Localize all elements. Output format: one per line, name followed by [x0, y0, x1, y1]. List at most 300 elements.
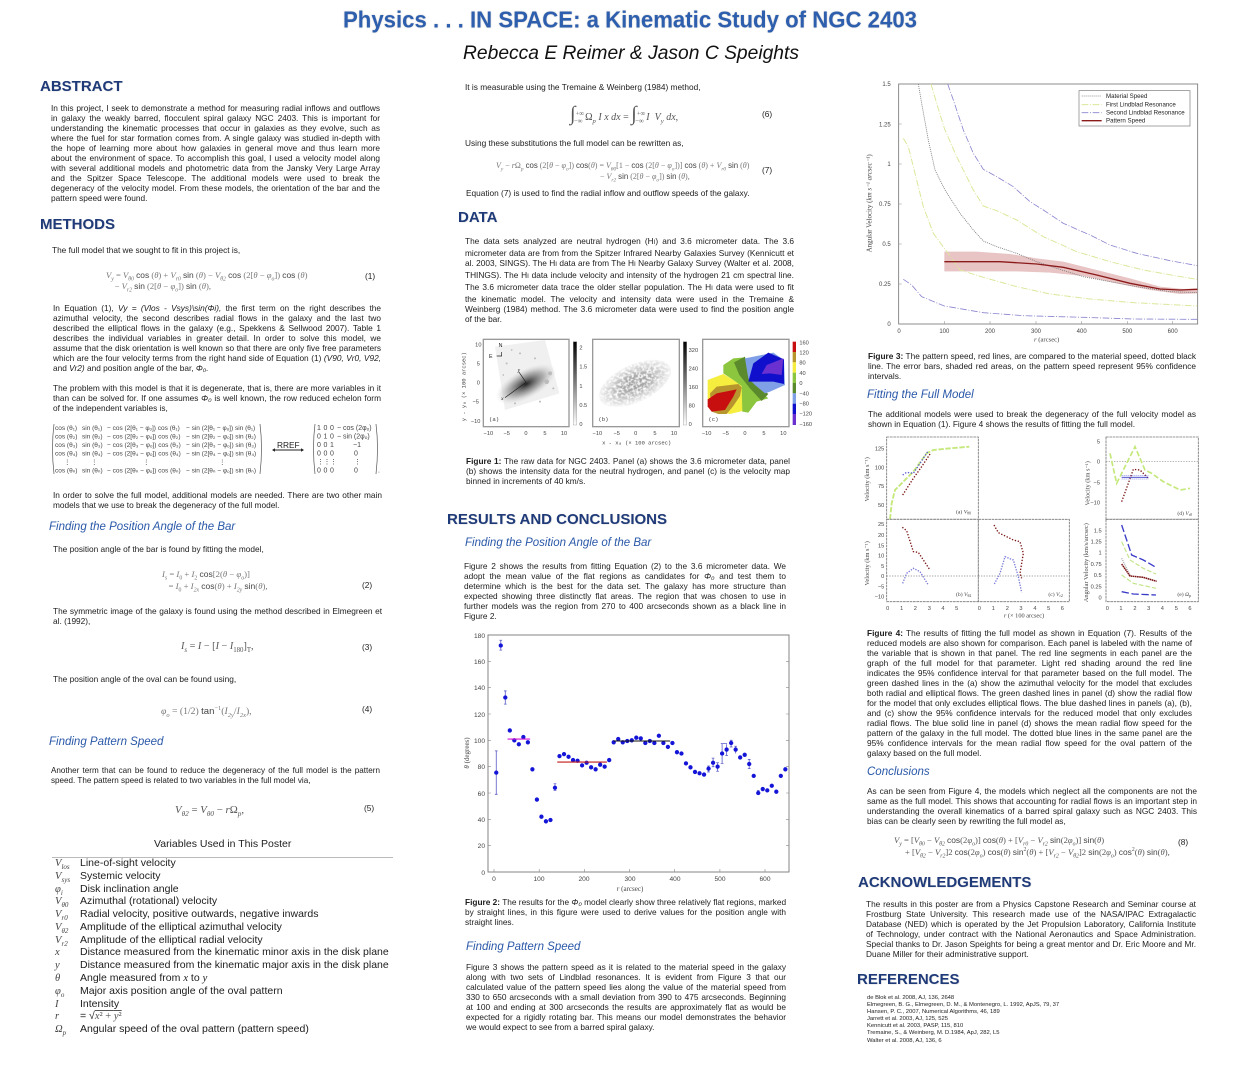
tick labels: 300: [1031, 329, 1042, 335]
panel a: [887, 437, 978, 519]
colorbar c: 160: [799, 341, 809, 347]
tick labels: 100: [875, 465, 884, 471]
matrix equation with RREF arrow: −1: [353, 442, 361, 449]
matrix equation with RREF arrow: 1: [317, 425, 321, 432]
text: abstract: in galaxy the weakly barred, flocculent spiral galaxy NGC 2403. This is important for: [51, 113, 380, 123]
panel b: [887, 519, 978, 602]
matrix equation with RREF arrow: − sin (2[θₙ − φₒ]) sin (θₙ): [186, 468, 256, 474]
figure 4 caption: 95% confidence intervals for the mean radial flow speed for the oval pattern of the: [867, 738, 1192, 748]
variable row: [55, 1010, 122, 1022]
figure 4 caption: pattern of the galaxy in the full model. The dotted blue lines in the same panel are the: [867, 728, 1192, 738]
subheading: position angle results: Finding the Position Angle of the Bar: [465, 537, 651, 549]
text: abstract: where the fuel for star formation comes from. A single galaxy was studied in-depth with: [51, 133, 380, 143]
text: symmetric image: al. (1992),: [53, 616, 90, 626]
tick labels: 60: [478, 791, 485, 798]
text: data description: [465, 236, 794, 324]
equation 4: φo = (1/2) tan−1(I2y/I2x),: [161, 705, 252, 719]
variable row: Angle measured from x to y: [80, 972, 207, 984]
figure 1 axis labels: 0: [743, 431, 747, 437]
figure 4: multi-panel velocity fits: [0, 0, 1260, 630]
tick labels: 200: [578, 876, 590, 883]
text: oval position angle: The position angle of the oval can be found using,: [53, 674, 236, 684]
equation 7: Vy − rΩp cos (2[θ − φo]) cos(θ) = Vθ0[1 − cos (2[θ − φo])] cos (θ) + Vr0 sin (θ): [496, 161, 749, 173]
matrix equation with RREF arrow: − cos (2[θ₁ − φₒ]) cos (θ₁): [107, 425, 180, 432]
text: figure 2 discussion: [464, 561, 786, 621]
variable row: r: [55, 1011, 59, 1022]
text: conclusions: [867, 786, 1197, 826]
text: equation 1 description: and Vr2) and position angle of the bar, Φ₀.: [53, 363, 209, 373]
tick labels: 6: [1061, 606, 1064, 612]
colorbar b: 160: [689, 385, 698, 391]
figure 1 axis labels: −10: [702, 431, 711, 437]
tick labels: 0: [978, 606, 981, 612]
colorbar a: 0.5: [579, 403, 587, 409]
figure 2 caption: [465, 897, 786, 927]
matrix equation with RREF arrow: cos (θ₃): [55, 442, 78, 449]
variable row: Ωp: [55, 1024, 66, 1037]
tick labels: 25: [878, 522, 884, 528]
tick labels: 0.5: [1094, 573, 1102, 579]
text: acknowledgements: [866, 899, 1196, 959]
colorbar c: 80: [799, 361, 806, 367]
panel e: [1106, 519, 1198, 602]
text: conclusions: bias can be clearly seen by rewriting the full model as,: [867, 816, 1066, 826]
figure 2 caption: Figure 2: The results for the Φ₀ model clearly show three relatively flat regions, marked: [465, 897, 786, 907]
text: equation 1 description: described the elliptical flows in the galaxy (e.g., Spekkens & Sellwood 2007). Table 1: [53, 323, 381, 333]
panel a: 3.6 micrometer map: [483, 339, 569, 427]
tick labels: 4: [941, 606, 945, 612]
tick labels: 0: [1097, 460, 1100, 466]
variable row: Vθ2: [55, 922, 68, 935]
figure 3 caption: line. The error bars, shaded red areas, on the pattern speed represent 95% confidence: [868, 361, 1196, 371]
tick labels: 0: [881, 574, 884, 580]
matrix equation with RREF arrow: 0: [354, 468, 358, 474]
tick labels: 15: [878, 543, 884, 549]
text: full model fit: shown in Equation (1). Figure 4 shows the results of fitting the full model.: [868, 419, 1135, 429]
heading: data: DATA: [458, 209, 497, 226]
figure 1 axis labels: −5: [613, 431, 620, 437]
panel d: r0: [1189, 512, 1192, 517]
figure 2 caption: by straight lines, in this figure were used to derive values for the position angle with: [465, 907, 786, 917]
text: degeneracy problem: [53, 383, 381, 413]
text: pattern speed intro: [51, 766, 380, 785]
tick labels: 1: [887, 162, 891, 168]
text: equation 1 description: assume that the disk orientation is well known so that there are only five free parameters: [53, 343, 381, 353]
equation 5: Vθ2 = Vθ0 − rΩp,: [175, 804, 244, 818]
variable row: Intensity: [80, 998, 119, 1010]
text: equation 1 description: which are the four velocity terms from the right hand side of Equation (1) (V90, Vr0, V92,: [53, 353, 381, 363]
figure 4 caption: galaxy based on the full model.: [867, 748, 981, 758]
equation 7: [496, 161, 750, 184]
matrix equation with RREF arrow: − sin (2[θ₂ − φₒ]) sin (θ₂): [186, 434, 256, 440]
text: equation 1 description: azimuthal velocity, the second describes radial flows in the galaxy and the last two: [53, 313, 381, 323]
text: acknowledgements: Frostburg State University. This research made use of the NASA/IPAC Extragalactic: [866, 909, 1196, 919]
text: conclusions: As can be seen from Figure 4, the models which neglect all the components are not the: [867, 786, 1197, 796]
matrix equation with RREF arrow: sin (θ₃): [82, 442, 103, 449]
text: acknowledgements: Special thanks to Dr. Jason Speights for being a great mentor and Dr. Eric Moore and Mr.: [866, 939, 1196, 949]
tick labels: [474, 633, 771, 883]
matrix equation with RREF arrow: cos (θ₂): [55, 434, 77, 440]
tick labels: 1: [1099, 551, 1102, 557]
text: full model fit: The additional models were used to break the degeneracy of the full velocity model as: [868, 409, 1196, 419]
text: degeneracy problem: than can be solved for. If one assumes Φ₀ is well known, the row reduced echelon form: [53, 393, 381, 403]
panel e: (e) Ω: [1177, 592, 1189, 598]
panel b: hydrogen intensity map: (b): [598, 416, 609, 423]
tick labels: 100: [939, 329, 950, 335]
figure 1 axis labels: 10: [561, 431, 567, 437]
tick labels: 0.5: [882, 242, 891, 248]
text: equation 1 description: In Equation (1), Vy = (Vlos - Vsys)\sin(Φi), the first term on the right describes the: [53, 303, 381, 313]
matrix equation with RREF arrow: cos (θₙ): [55, 468, 77, 474]
matrix equation with RREF arrow: 0: [354, 450, 358, 458]
figure 1 axis labels: 5: [653, 431, 657, 437]
colorbar c: −40: [799, 391, 809, 397]
tick labels: 0.25: [1091, 585, 1102, 591]
tick labels: 200: [985, 329, 996, 335]
matrix equation with RREF arrow: cos (θ₄): [55, 450, 78, 458]
figure 1 axis labels: 0: [634, 431, 637, 437]
text: abstract: the hope of learning more about how galaxies in general move and thus learn more: [51, 143, 380, 153]
matrix equation with RREF arrow: ⋮: [64, 459, 70, 466]
text: figure 3 discussion: [466, 962, 786, 1032]
colorbar c: [793, 341, 812, 428]
text: figure 3 discussion: 330 to 650 arcseconds with a small deviation from 390 to 475 arcseconds. Beginning: [466, 992, 786, 1002]
equation number 5: (5): [364, 803, 374, 813]
matrix equation with RREF arrow: − cos (2[θ₃ − φₒ]) cos (θ₃): [107, 442, 181, 449]
colorbar a: 1: [579, 384, 582, 390]
tick labels: 0: [887, 322, 891, 328]
axis ticks: [488, 661, 789, 872]
text: conclusions: understanding the overall kinematics of a barred spiral galaxy such as NGC 2403. This: [867, 806, 1197, 816]
tick labels: 600: [759, 876, 771, 883]
text: abstract: and the Spitzer Space Telescope. The additional models were used to break the: [51, 173, 380, 183]
figure 3 caption: intervals.: [868, 371, 901, 381]
subheading: pattern speed results: Finding Pattern Speed: [466, 941, 580, 953]
matrix equation with RREF arrow: − cos (2[θₙ − φₒ]) cos (θₙ): [107, 468, 181, 474]
legend: Second Lindblad Resonance: [1106, 110, 1185, 117]
text: figure 2 discussion: Figure 2 shows the results from fitting Equation (2) to the 3.6 micrometer data. We: [464, 561, 786, 571]
figure 1 axis labels: −10: [593, 431, 602, 437]
colorbar c: −80: [799, 402, 809, 408]
table title: variables: Variables Used in This Poster: [154, 838, 291, 850]
figure 4 caption: graph of the full model for that parameter. Light red shading around the red line: [867, 658, 1192, 668]
pattern speed curve: [944, 262, 1197, 290]
tick labels: 5: [881, 564, 884, 570]
figure 1 axis labels: 5: [477, 361, 480, 367]
panel a: 3.6 micrometer map: E: [489, 354, 493, 360]
tick labels: [875, 440, 1192, 612]
equation 8: Vy = [Vθ0 − Vθ2 cos(2φo)] cos(θ) + [Vr0 − Vr2 sin(2φo)] sin(θ): [894, 835, 1104, 848]
matrix equation with RREF arrow: 0: [317, 450, 321, 458]
colorbar a: 0: [579, 422, 582, 428]
text: figure 3 discussion: Figure 3 shows the pattern speed as it is related to the material speed in the galaxy: [466, 962, 786, 972]
matrix equation with RREF arrow: 0: [324, 468, 328, 474]
tick labels: 6: [1188, 606, 1192, 612]
equation number 1: (1): [365, 271, 375, 281]
text: abstract: degeneracy of the velocity model. From these models, the orientation of the bar and the: [51, 183, 380, 193]
matrix equation with RREF arrow: 0: [324, 425, 328, 432]
panel c: velocity map: (c): [708, 416, 719, 423]
text: acknowledgements: of Technology, under contract with the National Aeronautics and Space Administration.: [866, 929, 1196, 939]
tick labels: 1.5: [1094, 529, 1102, 535]
variable row: Major axis position angle of the oval pattern: [80, 985, 283, 997]
text: figure 2 discussion: expected showing three distinctly flat areas. The region that was chosen to use in: [464, 591, 786, 601]
matrix equation with RREF arrow: − cos (2[θ₄ − φₒ]) cos (θ₄): [107, 450, 181, 458]
text: references list: de Blok et al. 2008, AJ, 136, 2648: [867, 994, 954, 1000]
equation 2: [162, 569, 268, 594]
variable row: [55, 882, 179, 897]
tick labels: 400: [669, 876, 681, 883]
variable row: θ: [55, 973, 60, 984]
tick labels: 80: [478, 764, 485, 771]
figure 1 axis labels: 5: [543, 431, 547, 437]
variable row: Vlos: [55, 858, 70, 871]
tick labels: 0.75: [1091, 562, 1102, 568]
figure 4 caption: [867, 628, 1192, 758]
figure 1: galaxy maps: [461, 338, 812, 446]
matrix equation with RREF arrow: ⋮: [219, 459, 226, 466]
tick labels: [879, 82, 1178, 335]
variable row: y: [55, 960, 60, 971]
matrix equation with RREF arrow: sin (θₙ): [82, 468, 103, 474]
equation 3: Is = I − [I − I180]T,: [181, 641, 254, 654]
text: full model fit: [868, 409, 1196, 429]
heading: references: REFERENCES: [857, 971, 960, 988]
tick labels: 0.75: [879, 202, 891, 208]
heading: acknowledgements: ACKNOWLEDGEMENTS: [858, 874, 1031, 891]
figure 1 axis labels: −10: [484, 431, 493, 437]
figure 3: angular velocity chart: Angular Velocity (km s⁻¹ arcsec⁻¹): [866, 154, 874, 252]
panel e: p: [1189, 593, 1191, 598]
variable row: Vr2: [55, 935, 68, 948]
tick labels: 5: [1097, 440, 1100, 446]
panel b: hydrogen intensity map: [592, 339, 679, 427]
heading: abstract: ABSTRACT: [40, 78, 122, 95]
matrix equation with RREF arrow: RREF: [277, 440, 300, 450]
legend: Material Speed: [1106, 93, 1148, 100]
tick labels: 5: [1175, 606, 1178, 612]
variable row: Distance measured from the kinematic major axis in the disk plane: [80, 959, 389, 971]
text: references list: Tremaine, S., & Weinberg, M. D.1984, ApJ, 282, L5: [867, 1030, 1000, 1036]
text: data description: Weinberg (1984) method. The 3.6 micrometer data were used to find the position angle: [465, 304, 794, 314]
panel b: (b) V: [956, 592, 967, 598]
figure 1 axis labels: [461, 342, 786, 446]
variable row: φi: [55, 884, 63, 897]
tick labels: 180: [474, 633, 485, 640]
tick labels: 5: [1047, 606, 1050, 612]
variable row: Line-of-sight velocity: [80, 857, 176, 869]
text: symmetric image: The symmetric image of the galaxy is found using the method described in Elmegreen et: [53, 606, 382, 616]
heading: results and conclusions: RESULTS AND CONCLUSIONS: [447, 511, 667, 528]
colorbar c: 120: [799, 351, 809, 357]
panel a: (a) V: [956, 509, 967, 515]
variable row: = √x² + y²: [80, 1010, 122, 1022]
panel a: θ0: [967, 510, 971, 515]
panel b: θ2: [967, 593, 971, 598]
text: figure 3 discussion: we would expect to see from a barred spiral galaxy.: [466, 1022, 654, 1032]
figure 4 caption: and (c) show the 95% confidence intervals for the reduced model that only excludes: [867, 708, 1192, 718]
text: data description: the kinematic model. The velocity and intensity data were used in the Tremaine &: [465, 294, 794, 304]
variables table: [54, 857, 389, 1037]
colorbar b: 0: [689, 422, 692, 428]
matrix equation with RREF arrow: 0: [330, 434, 334, 440]
variable row: Azimuthal (rotational) velocity: [80, 895, 217, 907]
figure 1 axis labels: 10: [475, 342, 481, 348]
panel a: 3.6 micrometer map: x: [500, 396, 504, 402]
text: acknowledgements: Duane Miller for their administrative support.: [866, 949, 1029, 959]
tick labels: 3: [1147, 606, 1150, 612]
tick labels: 1.25: [879, 123, 891, 129]
tick labels: 0: [492, 876, 496, 883]
figure 1 axis labels: 5: [762, 431, 766, 437]
text: equation 7 note: Equation (7) is used to find the radial inflow and outflow speeds of the galaxy.: [466, 188, 750, 198]
table rule: [52, 857, 393, 858]
figure 3: angular velocity chart: [866, 82, 1198, 344]
tick labels: 0: [897, 329, 901, 335]
figure 1 axis labels: −5: [503, 431, 510, 437]
text: data description: The 3.6 micrometer data trace the older stellar population. The HI data were used to fit: [465, 282, 794, 292]
text: abstract: understanding the kinematic processes that occur in galaxies as they evolve, such as: [51, 123, 380, 133]
variable row: x: [55, 947, 60, 958]
tick labels: 0: [1106, 606, 1109, 612]
text: symmetric image: [53, 606, 382, 626]
matrix equation with RREF arrow: − sin (2[θ₄ − φₒ]) sin (θ₄): [186, 450, 256, 458]
legend: First Lindblad Resonance: [1106, 101, 1176, 108]
text: equation 1 description: describes the individual variables in greater detail. In order to solve this model, we: [53, 333, 381, 343]
tick labels: 2: [914, 606, 917, 612]
axis labels: r (× 100 arcsec): [1004, 613, 1044, 620]
variable row: Angular speed of the oval pattern (pattern speed): [80, 1023, 309, 1035]
subheading: fitting full model: Fitting the Full Model: [867, 389, 974, 401]
text: figure 2 discussion: determine which is the best for the data set. The galaxy has more structure than: [464, 581, 786, 591]
panel d: (d) V: [1177, 511, 1189, 517]
matrix equation with RREF arrow: sin (θ₄): [82, 450, 103, 458]
text: references list: Hansen, P. C., 2007, Numerical Algorithms, 46, 189: [867, 1009, 1000, 1015]
matrix equation with RREF arrow: sin (θ₂): [82, 434, 103, 440]
colorbar a: 1.5: [579, 365, 587, 371]
axis labels: [864, 457, 1091, 620]
matrix equation with RREF arrow: − cos (2[θ₂ − φₒ]) cos (θ₂): [107, 434, 180, 440]
figure 1 caption: Figure 1: The raw data for NGC 2403. Panel (a) shows the 3.6 micrometer data, panel: [466, 456, 790, 466]
equation 1: − Vr2 sin (2[θ − φo]) sin (θ),: [115, 281, 211, 294]
subheading: position angle: Finding the Position Angle of the Bar: [49, 521, 235, 533]
second Lindblad resonance curves: [903, 84, 1197, 319]
figure 1 axis labels: 10: [671, 431, 677, 437]
figure 1 axis labels: 10: [780, 431, 786, 437]
equation number 8: (8): [1178, 837, 1188, 847]
variable row: Amplitude of the elliptical radial velocity: [80, 934, 263, 946]
panel c: (c) V: [1048, 592, 1060, 598]
matrix equation with RREF arrow: 0: [324, 442, 328, 449]
variable row: Disk inclination angle: [80, 882, 179, 894]
tick labels: 2: [1133, 606, 1137, 612]
variable row: Systemic velocity: [80, 870, 161, 882]
text: abstract: In this project, I seek to demonstrate a method for measuring radial inflows and outflows: [51, 103, 380, 113]
figure 4 caption: for the model that only excludes elliptical flows. The blue dashed lines in panels (a), (b),: [867, 698, 1192, 708]
text: data description: micrometer data are from from the Spitzer Infrared Nearby Galaxies Survey (Kennicutt et: [465, 248, 794, 258]
text: abstract: [51, 103, 380, 203]
tick labels: 2: [1006, 606, 1009, 612]
tick labels: 20: [478, 843, 485, 850]
figure 1 axis labels: x - x₀ (× 100 arcsec): [602, 439, 671, 446]
variable row: φo: [55, 986, 64, 999]
text: figure 3 discussion: at 100 and ending at 300 arcseconds the results are approximately flat as would be: [466, 1002, 786, 1012]
matrix equation with RREF arrow: ⋮: [317, 459, 324, 466]
matrix equation with RREF arrow: 0: [330, 425, 334, 432]
text: references list: Walter et al. 2008, AJ, 136, 6: [867, 1038, 942, 1044]
tick labels: −10: [875, 595, 884, 601]
figure 1 axis labels: 0: [524, 431, 528, 437]
panel c: r2: [1060, 593, 1063, 598]
tick labels: 3: [928, 606, 931, 612]
first Lindblad resonance curves: [903, 84, 1197, 306]
legend: [1079, 91, 1190, 126]
text: data description: of the bar.: [465, 314, 502, 324]
matrix equation with RREF arrow: 0: [330, 468, 334, 474]
tick labels: 0.25: [879, 282, 891, 288]
variable row: Vsys: [55, 871, 70, 884]
axis labels: Velocity (km s⁻¹): [864, 541, 871, 585]
matrix equation with RREF arrow: ⋮: [91, 459, 98, 466]
text: data description: THINGS). The HI data include velocity and intensity of the hydrogen 21 cm spectral line.: [465, 270, 794, 280]
panel a: 3.6 micrometer map: (a): [489, 416, 499, 423]
tick labels: 100: [474, 738, 485, 745]
equation number 6: (6): [762, 109, 772, 119]
tick labels: 160: [474, 659, 485, 666]
colorbar c: −120: [799, 412, 812, 418]
colorbar b: 240: [689, 366, 698, 372]
variable row: Vr0: [55, 909, 68, 922]
tick labels: 10: [878, 554, 884, 560]
text: abstract: pattern speed were found.: [51, 193, 147, 203]
figure 1 axis labels: 0: [477, 381, 480, 387]
tick labels: 1.5: [882, 82, 891, 88]
tick labels: 120: [474, 712, 485, 719]
text: figure 2 discussion: Figure 2.: [464, 611, 497, 621]
tick labels: −10: [1090, 501, 1100, 507]
text: references list: Elmegreen, B. G., Elmegreen, D. M., & Montenegro, L. 1992, ApJS, 79, 37: [867, 1002, 1059, 1008]
axis ticks: [899, 124, 1173, 324]
matrix equation with RREF arrow: [52, 424, 380, 474]
figure 2 caption: straight lines.: [465, 917, 514, 927]
text: figure 2 discussion: further models was the region from 270 to 400 arcseconds shown as a black line in: [464, 601, 786, 611]
tick labels: 300: [624, 876, 636, 883]
axis labels: Angular Velocity (km/s/arcsec): [1083, 523, 1090, 602]
text: equation 1 description: [53, 303, 381, 373]
variable row: [55, 998, 120, 1010]
matrix equation with RREF arrow: cos (θ₁): [55, 425, 77, 432]
panel a: 3.6 micrometer map: N: [499, 343, 503, 349]
colorbar c: 40: [799, 371, 806, 377]
tick labels: 3: [1019, 606, 1023, 612]
matrix equation with RREF arrow: 0: [324, 450, 328, 458]
variable row: Radial velocity, positive outwards, negative inwards: [80, 908, 319, 920]
tick labels: 40: [478, 817, 485, 824]
figure 4 caption: the variable that is shown in that panel. The red line segments in each panel are the: [867, 648, 1192, 658]
figure 1 caption: (b) shows the intensity data for the neutral hydrogen, and panel (c) is the velocity map: [466, 466, 790, 476]
variable row: Vθ0: [55, 896, 68, 909]
figure 3 caption: Figure 3: The pattern speed, red lines, are compared to the material speed, dotted black: [868, 351, 1196, 361]
matrix equation with RREF arrow: 0: [317, 434, 321, 440]
figure 1 axis labels: −5: [722, 431, 729, 437]
text: data description: The data sets analyzed are neutral hydrogen (HI) and 3.6 micrometer data. The 3.6: [465, 236, 794, 246]
matrix equation with RREF arrow: 0: [317, 468, 321, 474]
tick labels: 50: [878, 503, 884, 509]
colorbar a: 2: [579, 345, 582, 351]
variable row: [55, 857, 176, 871]
text: additional models: In order to solve the full model, additional models are needed. There are two other main: [53, 490, 382, 500]
figure 4 caption: indicates the 95% confidence interval for that parameter based on the full model. The: [867, 668, 1192, 678]
